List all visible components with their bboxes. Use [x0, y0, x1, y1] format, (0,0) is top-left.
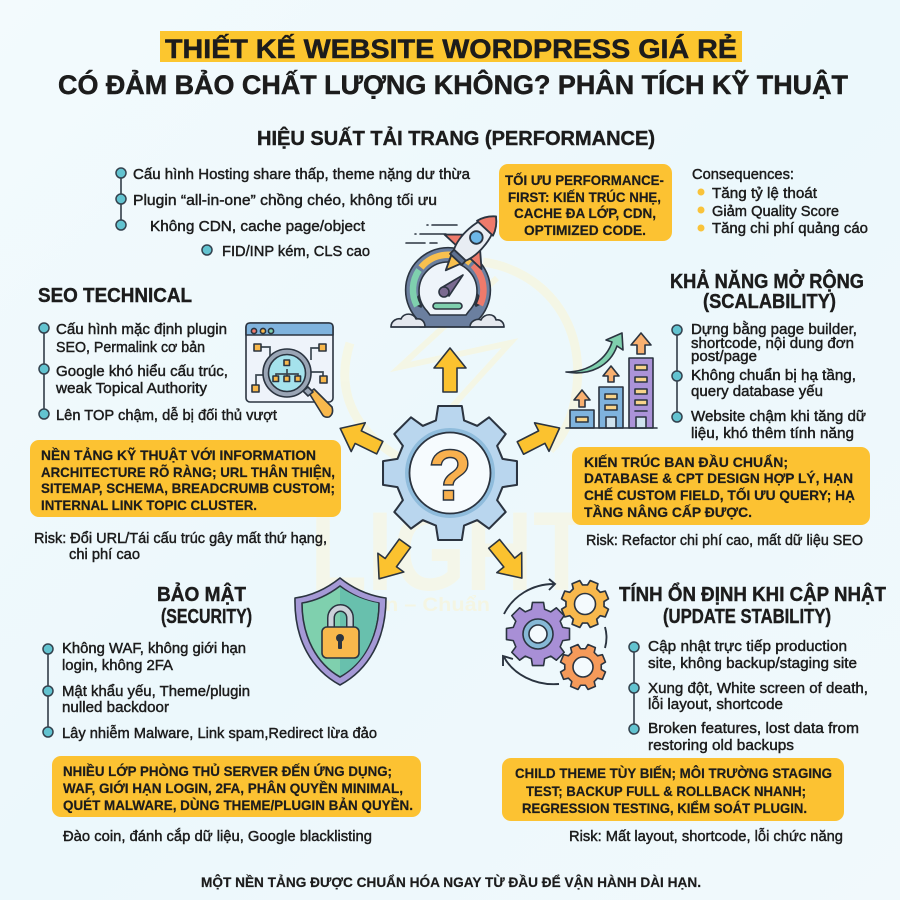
callout: performance solution: TỐI ƯU PERFORMANCE-	[505, 171, 664, 188]
arrow: down-left	[366, 534, 418, 588]
bullet list: performance issues: FID/INP kém, CLS cao	[222, 243, 370, 260]
central gear with question mark: ?	[428, 436, 472, 516]
arrow: down-right	[482, 534, 534, 588]
callout: performance solution: OPTIMIZED CODE.	[524, 222, 646, 238]
bullet list: update issues: Broken features, lost data from	[648, 720, 859, 737]
bullet list: security issues: Không WAF, không giới hạn	[62, 640, 246, 657]
callout: SEO solution: SITEMAP, SCHEMA, BREADCRUMB CUSTOM;	[41, 480, 335, 496]
bullet list: update issues: Cập nhật trực tiếp production	[648, 638, 847, 655]
watermark: n – Chuẩn	[385, 595, 490, 616]
bullet list: SEO issues: Lên TOP chậm, dễ bị đối thủ vượt	[56, 407, 278, 424]
bullet list: update issues: lỗi layout, shortcode	[648, 696, 783, 713]
callout: SEO solution	[30, 440, 341, 517]
callout: scalability solution: KIẾN TRÚC BAN ĐẦU CHUẨN;	[584, 453, 788, 470]
heading: security: (SECURITY)	[161, 606, 252, 628]
panel: SEO technical	[30, 285, 341, 563]
panel: update stability	[502, 573, 886, 845]
arrow: up	[434, 348, 466, 392]
bullet list: SEO issues	[39, 321, 278, 424]
bullet list: performance issues: Plugin “all-in-one” chồng chéo, không tối ưu	[133, 192, 437, 209]
bullet list: security issues: login, không 2FA	[62, 657, 173, 674]
callout: performance solution: FIRST: KIẾN TRÚC NHẸ,	[508, 188, 661, 205]
bullet list: scalability issues: Không chuẩn bị hạ tầng,	[691, 367, 856, 384]
heading: performance: HIỆU SUẤT TẢI TRANG (PERFORMANCE)	[257, 126, 655, 150]
bullet list: SEO issues: Google khó hiểu cấu trúc,	[56, 363, 228, 380]
bullet list: update issues: Xung đột, White screen of death,	[648, 680, 868, 697]
bullet list: security issues: nulled backdoor	[62, 699, 169, 716]
risk note: security: Đào coin, đánh cắp dữ liệu, Google blacklisting	[63, 828, 372, 845]
bullet list: scalability issues: shortcode, nội dung đơn	[691, 335, 854, 352]
panel: scalability	[566, 269, 870, 549]
bullet list: scalability issues: Dựng bằng page builder,	[691, 321, 857, 338]
risk note: SEO	[34, 530, 327, 563]
bullet list: scalability issues: Website chậm khi tăng dữ	[691, 408, 866, 425]
callout: scalability solution: DATABASE & CPT DESIGN HỢP LÝ, HẠN	[584, 469, 853, 486]
heading: update stability: (UPDATE STABILITY)	[663, 606, 831, 628]
bullet list: security issues	[43, 640, 377, 742]
panel: performance	[116, 126, 868, 327]
callout: security solution: QUÉT MALWARE, DÙNG THEME/PLUGIN BẢN QUYỀN.	[63, 796, 413, 813]
icon: rotating gears	[503, 573, 616, 697]
callout: scalability solution: TẦNG NÂNG CẤP ĐƯỢC.	[584, 503, 752, 520]
callout: SEO solution: NỀN TẢNG KỸ THUẬT VỚI INFORMATION	[41, 446, 316, 463]
bullet list: scalability issues	[672, 321, 866, 442]
bullet list: update issues	[629, 638, 868, 754]
title: CÓ ĐẢM BẢO CHẤT LƯỢNG KHÔNG? PHÂN TÍCH KỸ THUẬT	[58, 68, 849, 100]
bullet list: SEO issues: weak Topical Authority	[55, 380, 208, 397]
title	[58, 31, 849, 100]
icon: rocket speedometer	[391, 199, 514, 327]
risk note: SEO: Risk: Đổi URL/Tái cấu trúc gây mất thứ hạng,	[34, 530, 327, 547]
heading: SEO technical: SEO TECHNICAL	[38, 285, 192, 307]
callout: security solution: NHIỀU LỚP PHÒNG THỦ SERVER ĐẾN ỨNG DỤNG;	[63, 762, 392, 779]
callout: update solution	[502, 758, 844, 821]
icon: shield lock	[295, 578, 386, 685]
consequences list: Giảm Quality Score	[712, 203, 839, 220]
title: THIẾT KẾ WEBSITE WORDPRESS GIÁ RẺ	[165, 32, 737, 64]
consequences list: Tăng tỷ lệ thoát	[712, 185, 818, 202]
footer statement: MỘT NỀN TẢNG ĐƯỢC CHUẨN HÓA NGAY TỪ ĐẦU ĐỂ VẬN HÀNH DÀI HẠN.	[201, 873, 701, 890]
panel: security	[43, 578, 421, 845]
central gear with question mark	[383, 406, 517, 540]
callout: scalability solution	[572, 447, 870, 525]
heading: scalability: (SCALABILITY)	[703, 291, 836, 313]
heading: update stability: TÍNH ỔN ĐỊNH KHI CẬP NHẬT	[619, 582, 886, 606]
bullet list: performance issues: Không CDN, cache page/object	[150, 218, 366, 235]
watermark	[310, 262, 590, 616]
heading: security: BẢO MẬT	[157, 582, 246, 606]
callout: security solution: WAF, GIỚI HẠN LOGIN, 2FA, PHÂN QUYỀN MINIMAL,	[63, 779, 403, 796]
callout: update solution: CHILD THEME TÙY BIẾN; MÔI TRƯỜNG STAGING	[515, 764, 832, 781]
watermark: LIGHT	[310, 489, 590, 614]
icon: growing buildings	[566, 333, 657, 428]
bullet list: update issues: site, không backup/staging site	[648, 655, 857, 672]
risk note: scalability: Risk: Refactor chi phí cao, mất dữ liệu SEO	[586, 532, 863, 549]
callout: update solution: TEST; BACKUP FULL & ROLLBACK NHANH;	[526, 783, 806, 799]
icon: sitemap magnifier	[246, 323, 333, 417]
heading: scalability: KHẢ NĂNG MỞ RỘNG	[670, 269, 864, 293]
bullet list: update issues: restoring old backups	[648, 737, 794, 754]
risk note: SEO: chi phí cao	[69, 546, 140, 563]
bullet list: performance issues	[116, 166, 471, 260]
bullet list: SEO issues: Cấu hình mặc định plugin	[56, 321, 227, 338]
bullet list: security issues: Mật khẩu yếu, Theme/plugin	[62, 683, 250, 700]
bullet list: performance issues: Cấu hình Hosting share thấp, theme nặng dư thừa	[133, 166, 471, 183]
bullet list: scalability issues: liệu, khó thêm tính năng	[691, 425, 854, 442]
risk note: update: Risk: Mất layout, shortcode, lỗi chức năng	[569, 828, 843, 845]
bullet list: SEO issues: SEO, Permalink cơ bản	[56, 339, 205, 356]
callout: update solution: REGRESSION TESTING, KIỂM SOÁT PLUGIN.	[522, 799, 807, 816]
bullet list: scalability issues: query database yếu	[691, 383, 823, 400]
consequences list: Consequences:	[692, 166, 794, 183]
consequences list: Tăng chi phí quảng cáo	[712, 220, 868, 237]
heading: update stability	[619, 582, 886, 628]
consequences list	[692, 166, 868, 237]
callout: performance solution	[499, 164, 672, 241]
heading: security	[157, 582, 252, 628]
arrow: up-left	[333, 414, 387, 462]
callout: SEO solution: INTERNAL LINK TOPIC CLUSTER.	[41, 497, 257, 513]
bullet list: security issues: Lây nhiễm Malware, Link spam,Redirect lừa đảo	[62, 725, 377, 742]
callout: SEO solution: ARCHITECTURE RÕ RÀNG; URL THÂN THIỆN,	[41, 463, 335, 480]
callout: scalability solution: CHẾ CUSTOM FIELD, TỐI ƯU QUERY; HẠ	[584, 486, 855, 503]
callout: security solution	[52, 756, 421, 817]
callout: performance solution: CACHE ĐA LỚP, CDN,	[514, 204, 656, 221]
bullet list: scalability issues: post/page	[691, 348, 757, 365]
arrow: up-right	[513, 414, 567, 462]
heading: scalability	[670, 269, 864, 313]
